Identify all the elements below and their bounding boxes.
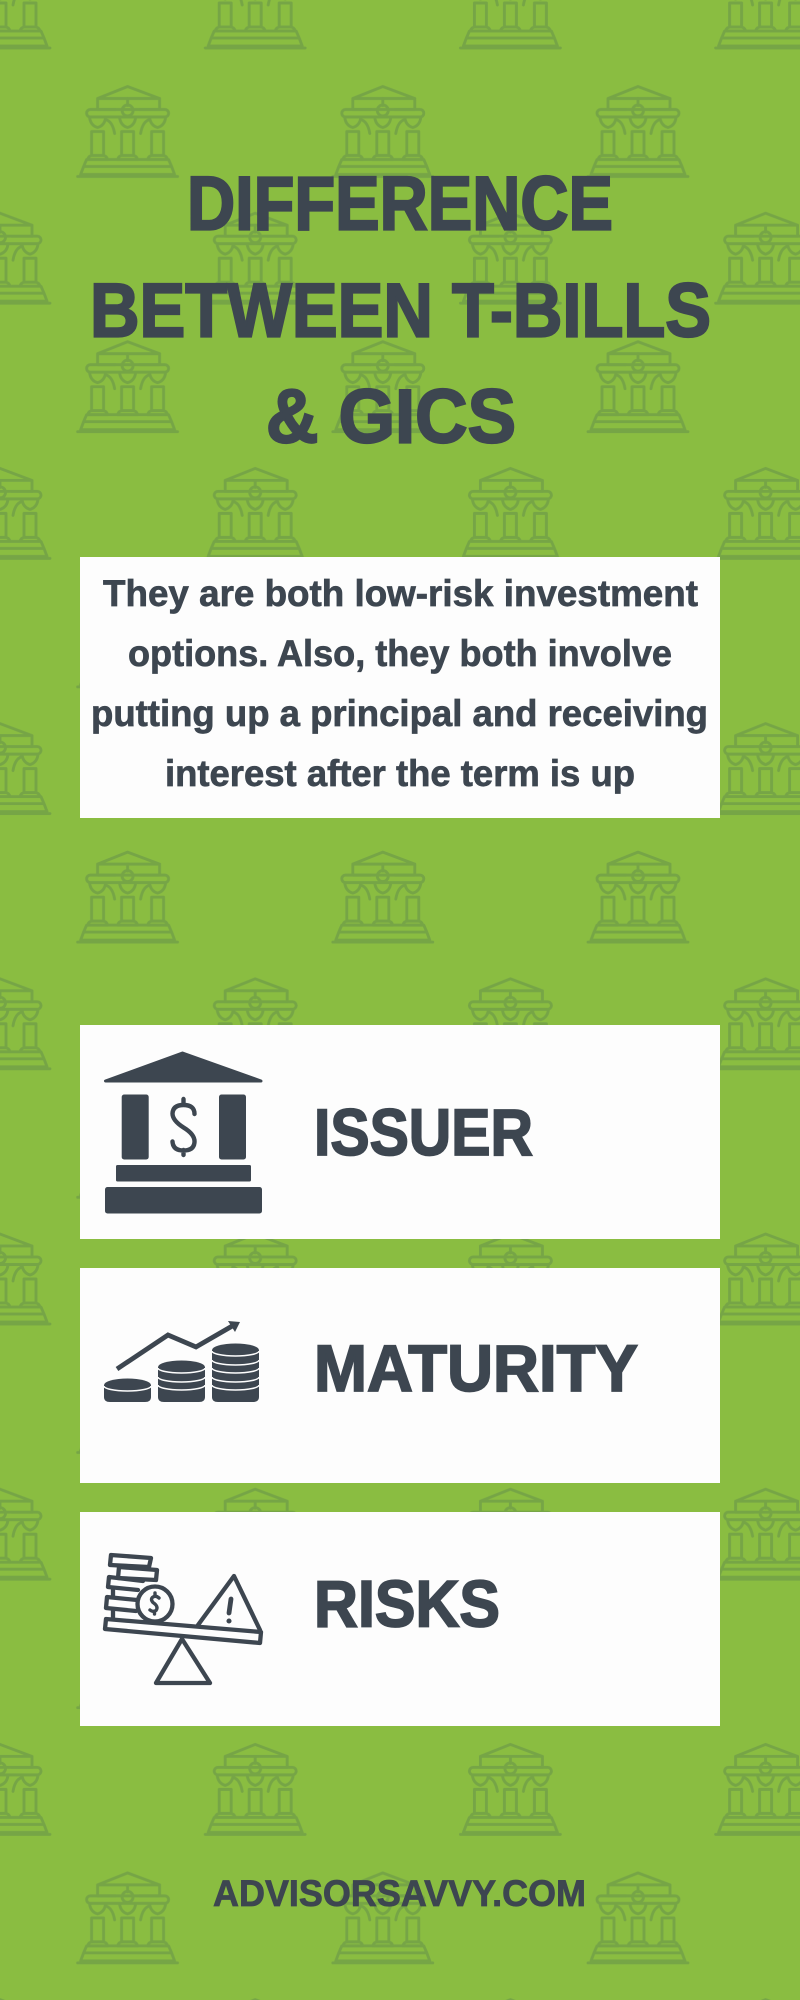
panel: issuer	[80, 1025, 720, 1239]
text block: intro: options. Also, they both involve	[128, 633, 672, 674]
icon: bank	[105, 1053, 262, 1214]
panel: maturity	[80, 1268, 720, 1483]
footer: website: ADVISORSAVVY.COM	[213, 1873, 586, 1914]
panel: intro text	[80, 557, 720, 818]
title: DIFFERENCE	[187, 162, 613, 246]
title: BETWEEN T-BILLS	[90, 268, 711, 354]
heading: risks: RISKS	[314, 1566, 500, 1640]
title: & GICS	[266, 374, 516, 460]
icon: balance with coins and warning	[105, 1555, 261, 1683]
panel: risks	[80, 1512, 720, 1726]
heading: maturity: MATURITY	[314, 1331, 638, 1405]
icon: rising coin stacks	[104, 1321, 259, 1402]
text block: intro: interest after the term is up	[165, 753, 635, 794]
text block: intro: putting up a principal and receiving	[91, 693, 708, 734]
text block: intro	[91, 573, 708, 794]
title	[90, 162, 711, 460]
heading: issuer: ISSUER	[314, 1095, 533, 1169]
text block: intro: They are both low-risk investment	[103, 573, 698, 614]
